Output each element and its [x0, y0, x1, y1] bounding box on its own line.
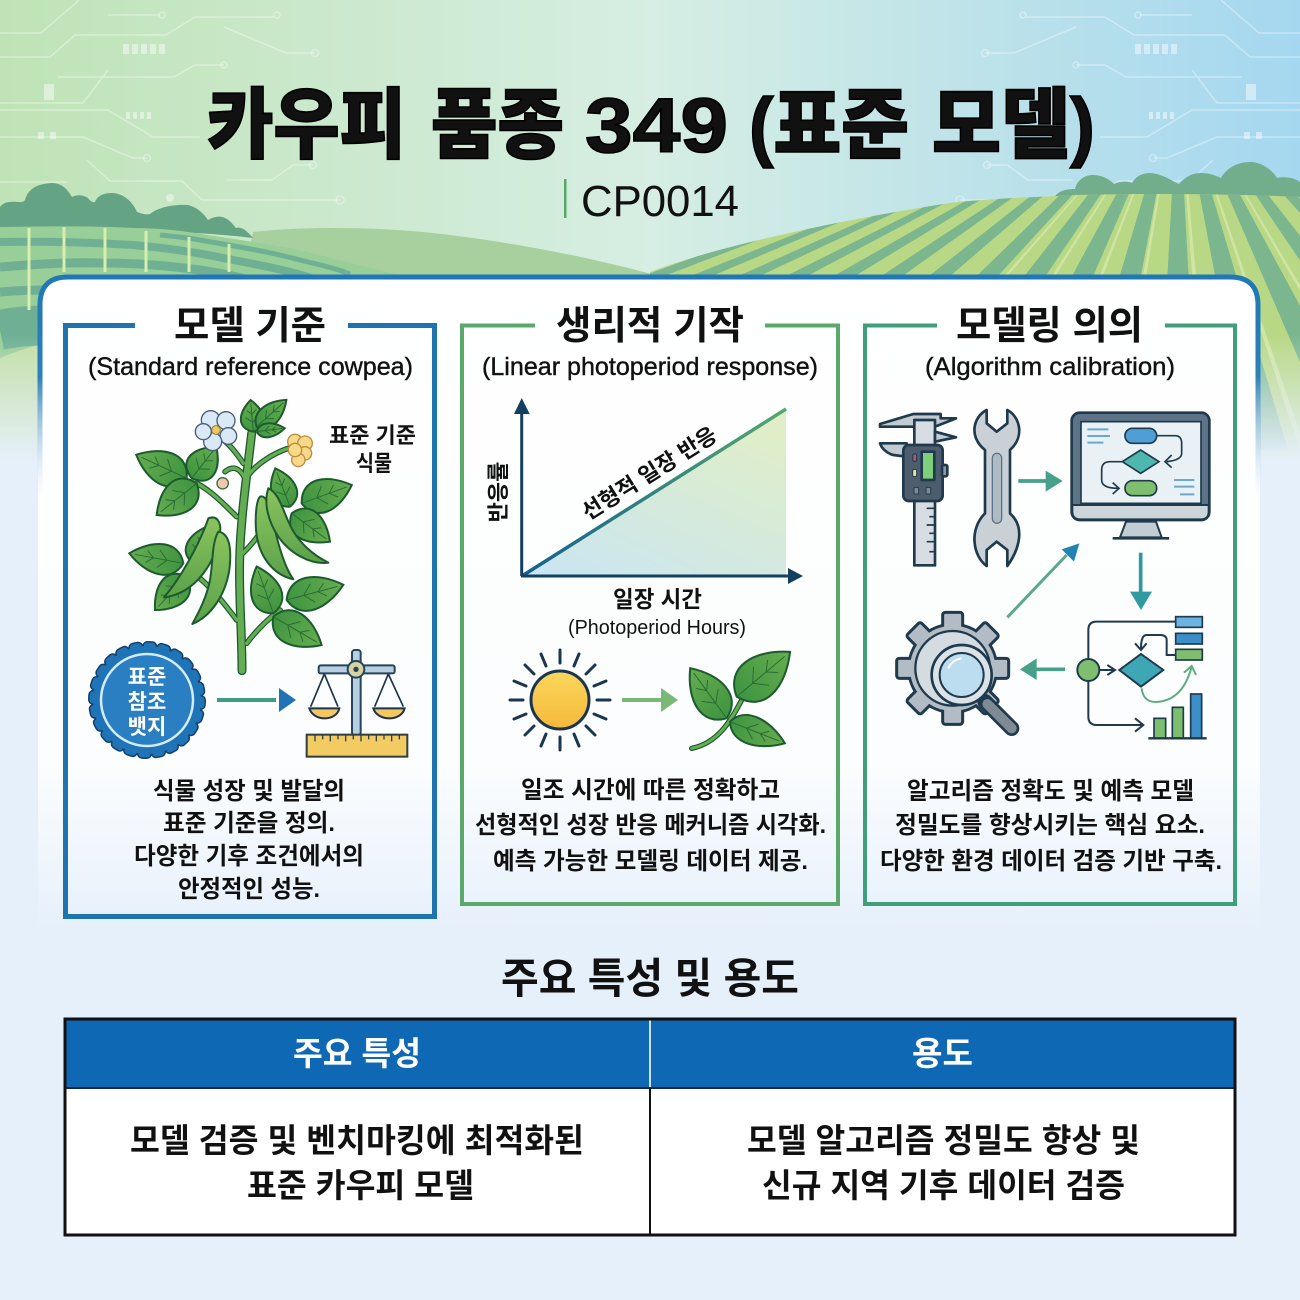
panel subheading: (Linear photoperiod response) [482, 353, 818, 381]
title: 품종 [431, 83, 564, 169]
panel subheading: (Standard reference cowpea) [88, 353, 413, 381]
panel: 생리적 기작 [462, 305, 838, 904]
table header row: 용도 [912, 1035, 973, 1072]
icon: wrench [974, 410, 1019, 566]
panel frame [865, 326, 1235, 904]
line chart: linear photoperiod response [486, 398, 803, 639]
background: sky gradient and farm fields [0, 0, 1300, 454]
description text: 선형적인 성장 반응 메커니즘 시각화. [475, 812, 826, 839]
description text [134, 778, 364, 903]
panel heading: 모델링 의의 [956, 305, 1143, 348]
panel: 모델 기준 [66, 305, 434, 916]
description text: 다양한 환경 데이터 검증 기반 구축. [880, 848, 1222, 875]
title [207, 83, 1095, 169]
main card [38, 275, 1260, 930]
panel heading: 모델 기준 [174, 305, 326, 348]
arrow: flowchart to gear [1035, 664, 1065, 675]
arrow: monitor to flowchart [1135, 553, 1146, 593]
illustration: cowpea plant [126, 392, 357, 671]
title: 349 [585, 83, 728, 169]
panel heading: 생리적 기작 [556, 305, 744, 348]
icon: monitor with flowchart [1072, 413, 1209, 520]
icon: standard reference badge: 뱃지 [128, 716, 166, 739]
arrow: badge to scale [217, 688, 296, 712]
cell: characteristics [130, 1122, 584, 1204]
section heading: 주요 특성 및 용도 [501, 955, 799, 1002]
title: 모델) [932, 83, 1095, 169]
title: (표준 [749, 83, 909, 169]
description text: 안정적인 성능. [178, 876, 320, 903]
icon: gear with magnifier [897, 612, 1012, 728]
icon: process flowchart with bars [1088, 622, 1176, 732]
line chart: linear photoperiod response: 일장 시간 [613, 586, 702, 612]
description text: 정밀도를 향상시키는 핵심 요소. [895, 812, 1205, 839]
description text: 다양한 기후 조건에서의 [134, 843, 364, 870]
cell: characteristics: 표준 카우피 모델 [247, 1167, 474, 1204]
icon: standard reference badge: 참조 [128, 691, 166, 714]
description text: 일조 시간에 따른 정확하고 [521, 777, 780, 804]
table header row: 주요 특성 [293, 1035, 421, 1072]
panel: 모델링 의의 [865, 305, 1235, 904]
cell: uses: 모델 알고리즘 정밀도 향상 및 [747, 1122, 1140, 1159]
table header row [65, 1019, 1235, 1088]
description text: 알고리즘 정확도 및 예측 모델 [907, 778, 1194, 805]
subtitle: CP0014 with green bar: CP0014 [581, 177, 739, 226]
icon: balance scale and ruler [307, 650, 407, 757]
arrow: gear to monitor [1007, 555, 1067, 617]
line chart: linear photoperiod response: 선형적 일장 반응 [577, 422, 721, 525]
icon: standard reference badge [93, 646, 201, 754]
table: characteristics and uses [65, 1019, 1235, 1235]
cell: uses: 신규 지역 기후 데이터 검증 [762, 1167, 1125, 1204]
title: 카우피 [207, 83, 406, 169]
description text: 표준 기준을 정의. [163, 810, 335, 837]
plant caption [329, 423, 416, 476]
flowers [195, 411, 237, 451]
line chart: linear photoperiod response: (Photoperiod Hours) [568, 617, 746, 639]
icon: leaf sprig [676, 636, 803, 756]
panel frame [462, 326, 838, 904]
arrow: sun to leaf [622, 688, 678, 712]
cell: uses [747, 1122, 1140, 1204]
pods [164, 488, 328, 624]
line chart: linear photoperiod response: 반응률 [486, 462, 511, 522]
icon group: calibration cycle [880, 410, 1209, 738]
panel frame [66, 326, 434, 916]
icon: sun [510, 650, 610, 750]
plant caption: 식물 [356, 451, 392, 476]
plant caption: 표준 기준 [329, 423, 416, 448]
cell: characteristics: 모델 검증 및 벤치마킹에 최적화된 [130, 1122, 584, 1159]
description text: 예측 가능한 모델링 데이터 제공. [493, 848, 808, 875]
description text [880, 778, 1222, 875]
panel subheading: (Algorithm calibration) [925, 353, 1175, 381]
description text [475, 777, 826, 875]
icon: caliper [880, 414, 956, 565]
description text: 식물 성장 및 발달의 [153, 778, 345, 805]
arrow: tools to monitor [1018, 475, 1047, 486]
icon: standard reference badge: 표준 [128, 666, 166, 689]
